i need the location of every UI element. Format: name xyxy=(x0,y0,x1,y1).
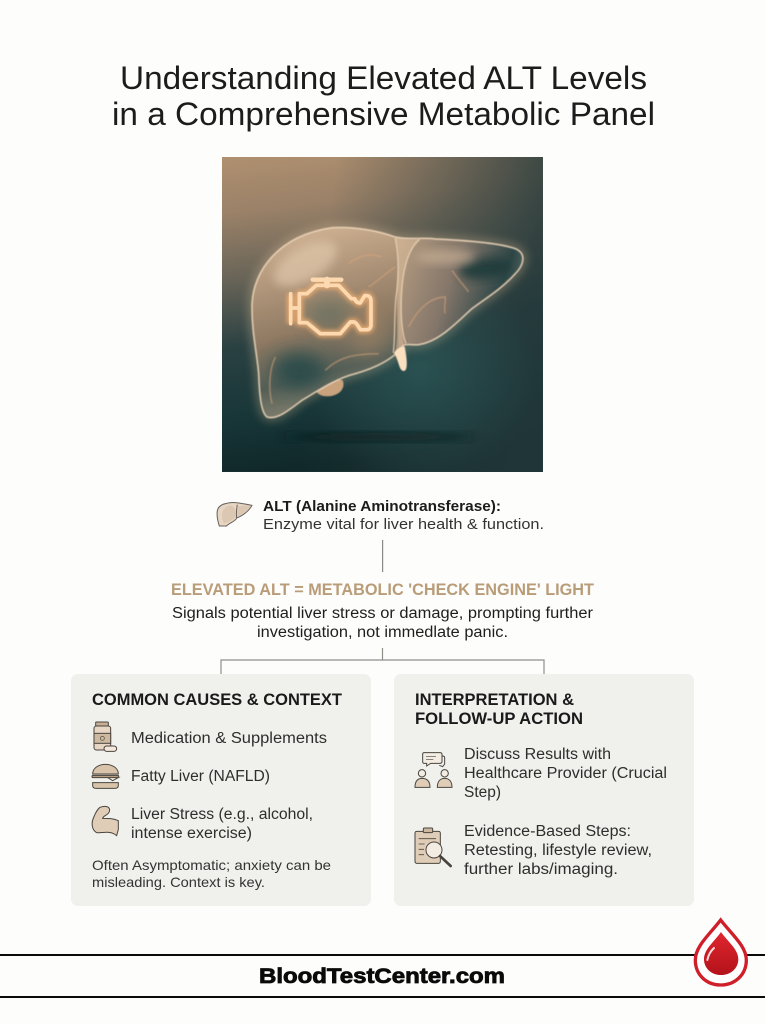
ALT definition: Enzyme vital for liver health & function. xyxy=(263,516,544,533)
bile duct xyxy=(394,346,407,371)
ALT definition xyxy=(263,498,544,533)
veins xyxy=(270,255,469,404)
heading: interpretation: INTERPRETATION & xyxy=(415,691,574,709)
text: discuss results: Step) xyxy=(464,784,501,801)
heading: interpretation: FOLLOW-UP ACTION xyxy=(415,710,583,728)
explanation text xyxy=(172,605,593,641)
ligament xyxy=(395,237,420,352)
icon: medication bottle xyxy=(94,722,117,751)
text: discuss results: Healthcare Provider (Crucial xyxy=(464,765,667,782)
connector: branching to panels xyxy=(221,648,544,674)
connector: definition to headline xyxy=(382,540,383,572)
explanation text: Signals potential liver stress or damage, prompting further xyxy=(172,605,593,622)
soft highlights xyxy=(272,240,338,290)
text: fatty liver: Fatty Liver (NAFLD) xyxy=(131,768,270,785)
icon: small liver xyxy=(217,503,252,526)
liver body xyxy=(249,225,529,422)
text: medication: Medication & Supplements xyxy=(131,730,327,747)
icon: flexed arm xyxy=(92,806,118,836)
illustration: glowing liver with check engine light xyxy=(222,157,543,472)
title: in a Comprehensive Metabolic Panel xyxy=(112,96,655,132)
icon: two people discussing xyxy=(415,753,452,787)
headline: elevated ALT: ELEVATED ALT = METABOLIC 'CHECK ENGINE' LIGHT xyxy=(171,581,594,599)
text: liver stress xyxy=(131,806,313,842)
liver glow xyxy=(252,227,523,418)
icon: blood drop logo xyxy=(695,920,746,985)
panel: common causes and context xyxy=(71,674,371,906)
heading: interpretation xyxy=(415,691,583,728)
text: liver stress: Liver Stress (e.g., alcohol, xyxy=(131,806,313,823)
explanation text: investigation, not immedlate panic. xyxy=(257,624,508,641)
text: discuss results: Discuss Results with xyxy=(464,746,611,763)
text: liver stress: intense exercise) xyxy=(131,825,252,842)
heading: common causes: COMMON CAUSES & CONTEXT xyxy=(92,691,342,709)
text: evidence-based steps: further labs/imaging. xyxy=(464,861,618,878)
text: evidence-based steps xyxy=(464,823,652,878)
title xyxy=(112,60,655,132)
footer: site name: BloodTestCenter.com xyxy=(259,965,505,988)
footer rules xyxy=(0,954,765,998)
text: evidence-based steps: Retesting, lifestyle review, xyxy=(464,842,652,859)
icon: burger xyxy=(92,764,119,788)
panel: interpretation and follow-up action xyxy=(394,674,694,906)
left lobe xyxy=(399,235,529,349)
icon: clipboard with magnifier xyxy=(415,828,451,866)
text: evidence-based steps: Evidence-Based Steps: xyxy=(464,823,631,840)
icon: check engine light xyxy=(291,280,371,334)
note: asymptomatic: Often Asymptomatic; anxiety can be xyxy=(92,857,331,873)
note: asymptomatic xyxy=(92,857,331,890)
liver outline xyxy=(252,227,523,418)
ground shadow xyxy=(282,433,475,441)
title: Understanding Elevated ALT Levels xyxy=(120,60,647,96)
gallbladder xyxy=(315,379,343,396)
right lobe xyxy=(249,225,402,422)
note: asymptomatic: misleading. Context is key. xyxy=(92,874,265,890)
ALT definition: ALT (Alanine Aminotransferase): xyxy=(263,498,501,515)
text: discuss results xyxy=(464,746,667,801)
